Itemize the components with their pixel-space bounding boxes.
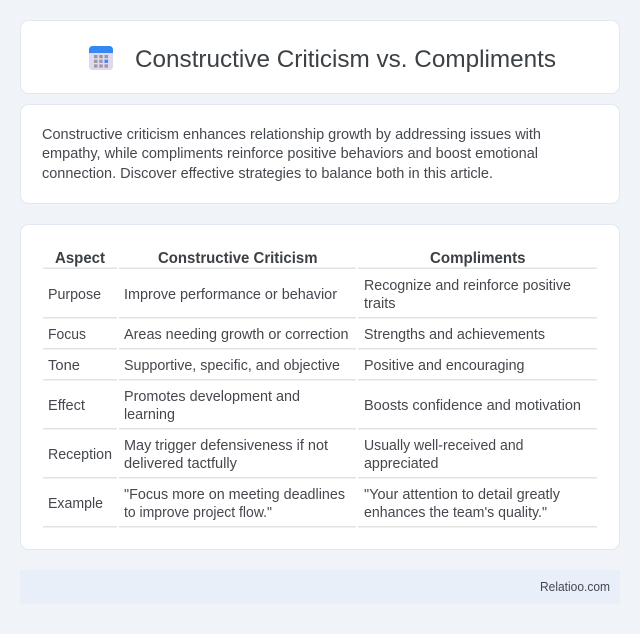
row: example: to improve project flow." [124, 505, 272, 521]
row: focus: Focus [48, 327, 86, 343]
row: example: "Focus more on meeting deadlines [124, 487, 345, 503]
table header: Compliments [430, 250, 526, 267]
row: focus: Areas needing growth or correction [124, 327, 348, 343]
panel: introduction [20, 104, 620, 204]
row: reception: Reception [48, 447, 112, 463]
panel: title card [20, 20, 620, 94]
row: reception: May trigger defensiveness if not [124, 438, 328, 454]
table header: Constructive Criticism [158, 250, 318, 267]
row: purpose: Purpose [48, 287, 101, 303]
row: tone: Positive and encouraging [364, 358, 524, 374]
row: tone: Tone [48, 358, 80, 374]
text block: introduction: Constructive criticism enhances relationship growth by addressing issues with [42, 127, 541, 143]
row: effect: Effect [48, 398, 85, 414]
row: reception: delivered tactfully [124, 456, 238, 472]
row: focus: Strengths and achievements [364, 327, 545, 343]
row: example: enhances the team's quality." [364, 505, 547, 521]
icon: calendar [89, 46, 113, 70]
row: effect: Boosts confidence and motivation [364, 398, 581, 414]
row: example: "Your attention to detail greatly [364, 487, 561, 503]
panel: comparison table [20, 224, 620, 550]
row: purpose: Improve performance or behavior [124, 287, 337, 303]
text block: introduction: empathy, while compliments reinforce positive behaviors and boost emotional [42, 146, 538, 162]
row: example: Example [48, 496, 103, 512]
text block: introduction [42, 127, 541, 182]
footer: Relatioo.com [540, 579, 610, 594]
row: focus [48, 327, 545, 343]
row: reception [48, 438, 524, 472]
table header [55, 250, 526, 267]
row: tone [48, 358, 524, 374]
table header: Aspect [55, 250, 105, 267]
row: reception: appreciated [364, 456, 438, 472]
row: purpose: traits [364, 296, 396, 312]
row: reception: Usually well-received and [364, 438, 524, 454]
row: purpose: Recognize and reinforce positive [364, 278, 571, 294]
text block: introduction: connection. Discover effective strategies to balance both in this article. [42, 166, 493, 182]
row: example [48, 487, 561, 521]
row: effect: learning [124, 407, 175, 423]
row: tone: Supportive, specific, and objective [124, 358, 340, 374]
footer [20, 570, 620, 604]
row: purpose [48, 278, 571, 312]
row: effect [48, 389, 581, 423]
title: Constructive Criticism vs. Compliments [135, 46, 556, 73]
row: effect: Promotes development and [124, 389, 300, 405]
